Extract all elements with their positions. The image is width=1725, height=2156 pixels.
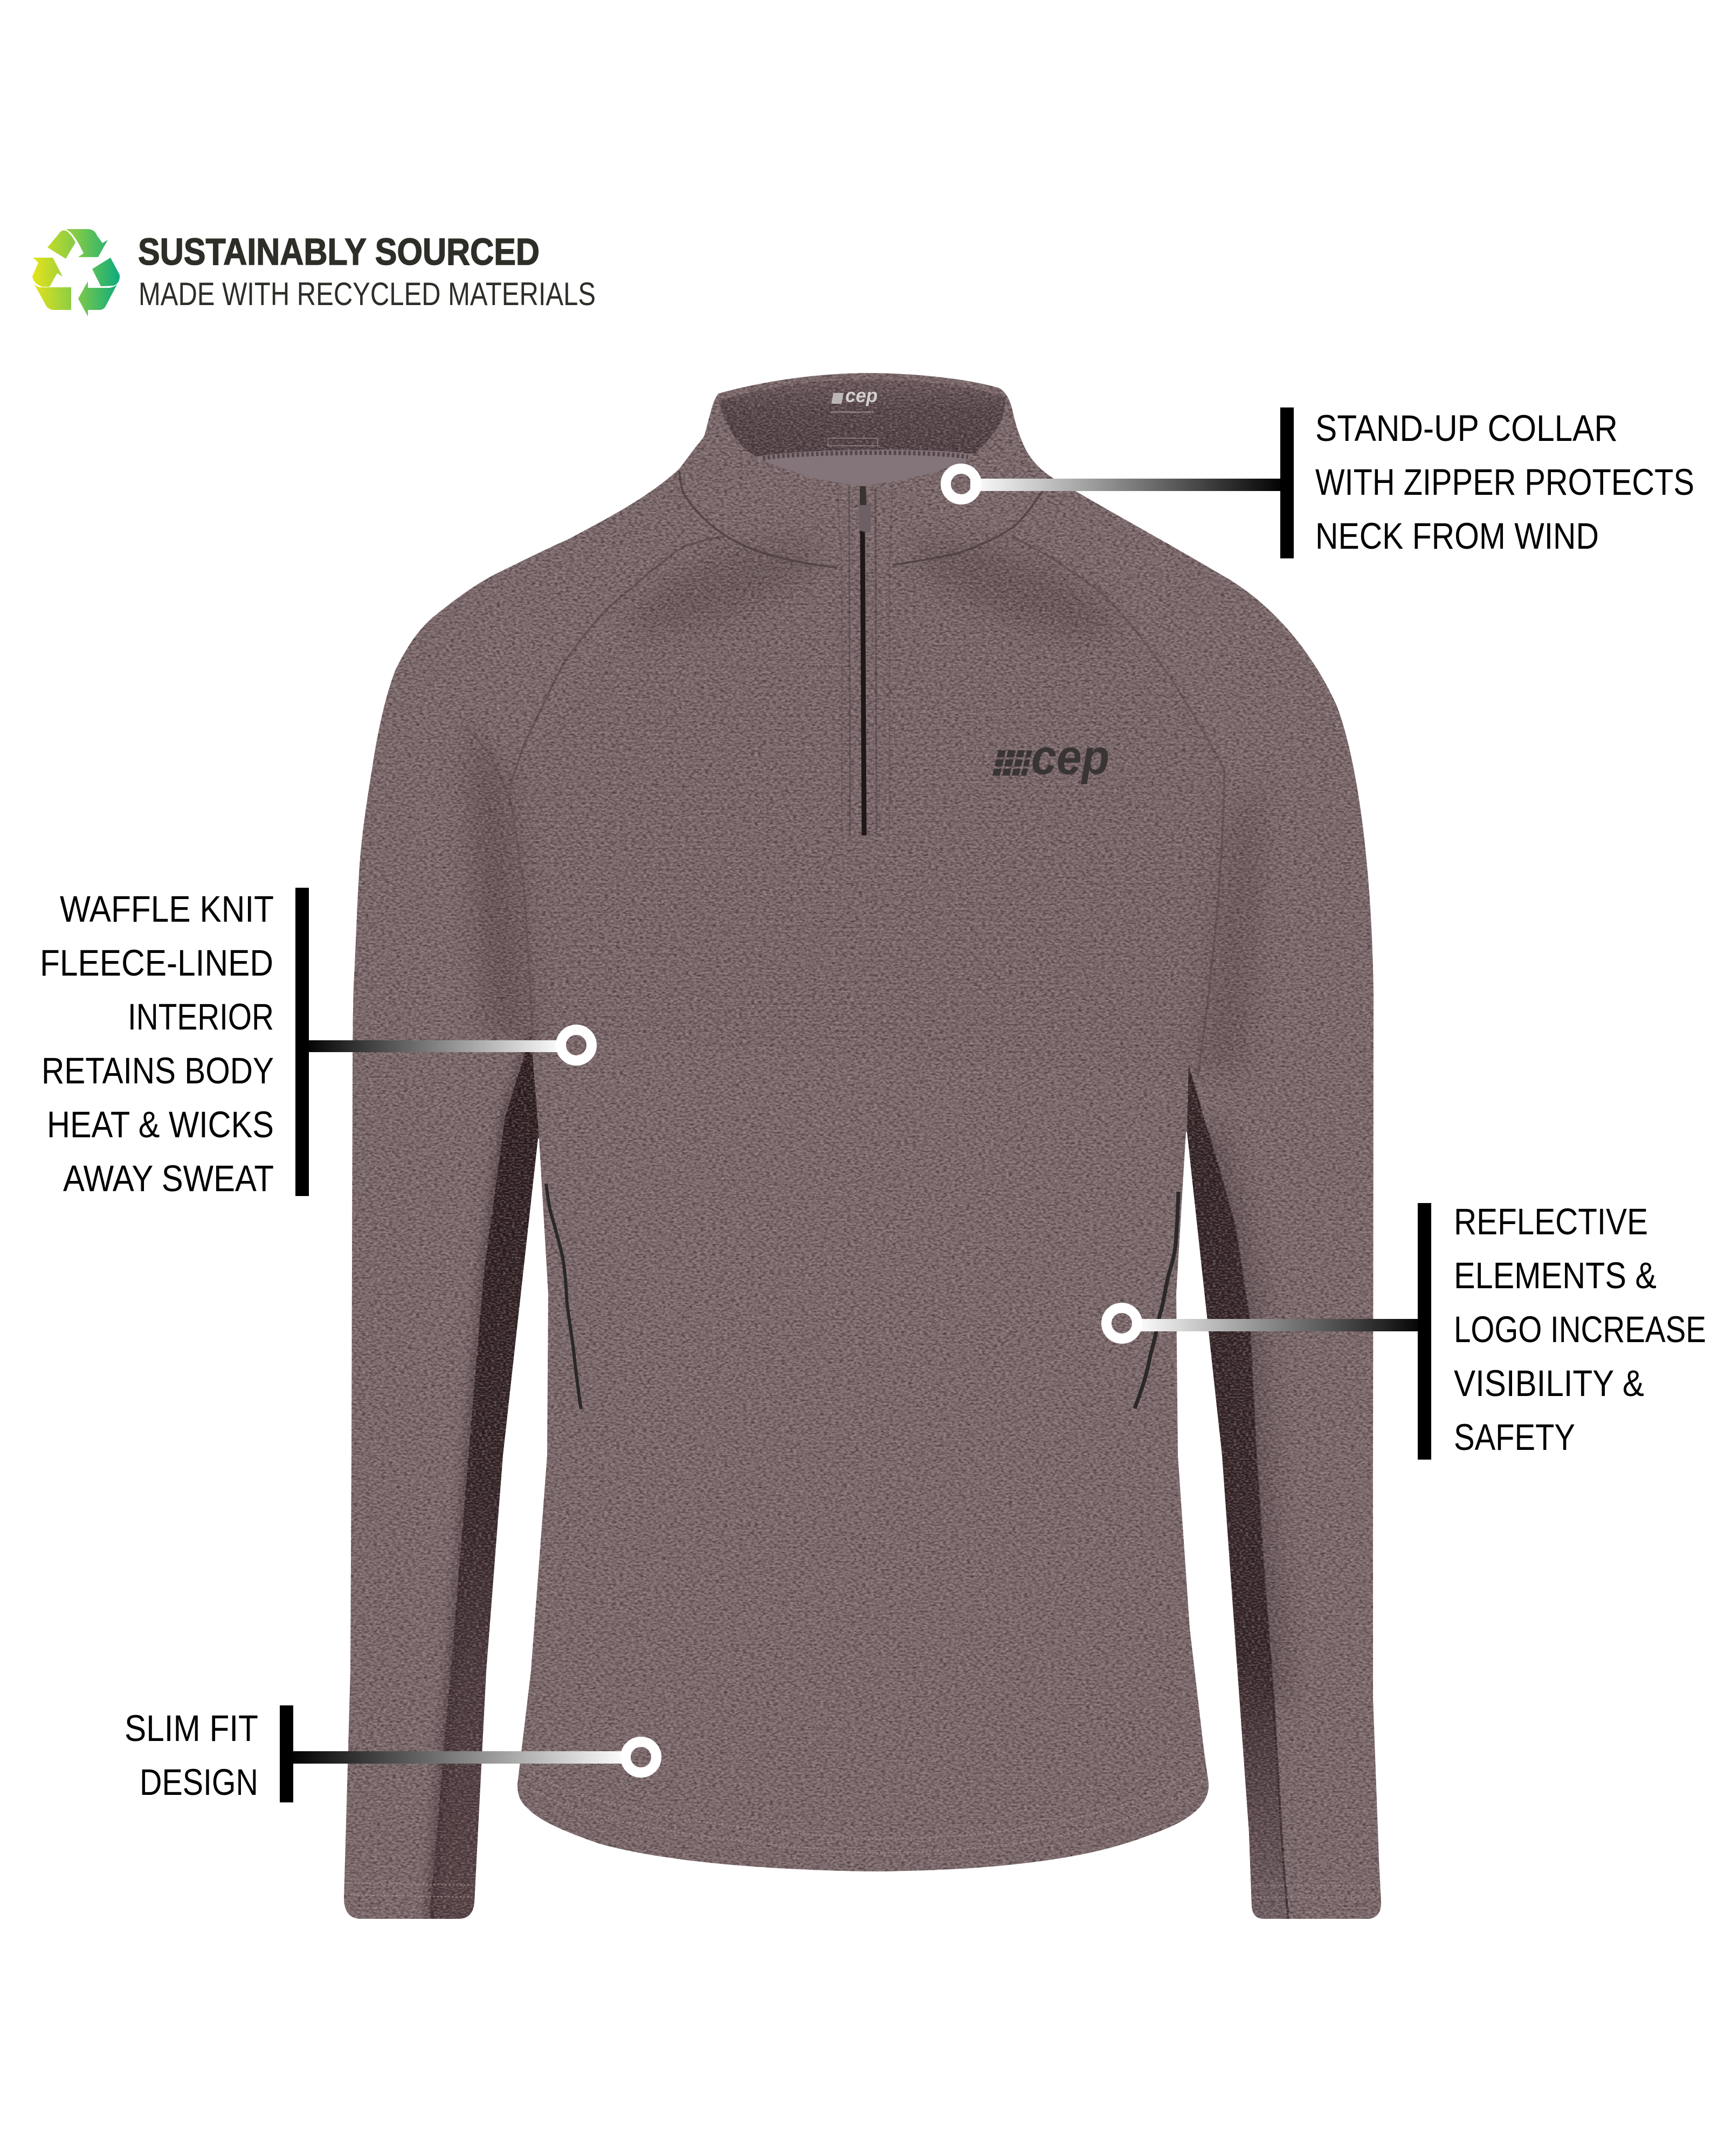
text block: VISIBILITY & bbox=[1454, 1363, 1644, 1404]
connector line bbox=[305, 1040, 563, 1052]
collar tag logo: cep bbox=[845, 384, 878, 406]
ring marker bbox=[561, 1029, 592, 1061]
callout: slim fit bbox=[125, 1705, 657, 1803]
right side panel shadow bbox=[1187, 1065, 1288, 1919]
chest logo bbox=[992, 730, 1109, 785]
text block: STAND-UP COLLAR bbox=[1315, 407, 1618, 449]
fabric heather noise bbox=[323, 367, 1402, 1930]
text block: INTERIOR bbox=[128, 996, 274, 1038]
bar bbox=[1418, 1203, 1431, 1460]
right sleeve fold shadow bbox=[1199, 776, 1262, 1073]
ring marker bbox=[1106, 1308, 1137, 1339]
connector line bbox=[970, 479, 1286, 491]
callout: waffle knit bbox=[40, 888, 592, 1199]
left sleeve fold shadow bbox=[469, 724, 533, 1038]
product photo: half-zip top bbox=[323, 367, 1402, 1930]
text block bbox=[1454, 1201, 1706, 1458]
text block: WAFFLE KNIT bbox=[60, 888, 274, 930]
text block: AWAY SWEAT bbox=[63, 1158, 274, 1199]
ring marker bbox=[625, 1742, 657, 1772]
collar and raglan seams bbox=[460, 471, 1224, 1076]
text block: NECK FROM WIND bbox=[1315, 515, 1599, 557]
connector line bbox=[288, 1751, 628, 1764]
heading: sustainably sourced bbox=[138, 231, 596, 312]
inner collar bbox=[719, 379, 1005, 457]
text block: SLIM FIT bbox=[125, 1708, 258, 1749]
bar bbox=[280, 1705, 293, 1802]
bar bbox=[295, 888, 309, 1196]
zipper bbox=[862, 531, 864, 835]
zipper pull bbox=[859, 505, 871, 532]
ring marker bbox=[946, 469, 977, 499]
left side panel shadow bbox=[429, 1035, 539, 1919]
recycling icon bbox=[32, 229, 120, 316]
text block bbox=[125, 1708, 258, 1803]
yoke shading right bbox=[917, 537, 1109, 638]
heading: sustainably sourced: SUSTAINABLY SOURCED bbox=[138, 231, 540, 273]
text block: SAFETY bbox=[1454, 1416, 1575, 1458]
text block: HEAT & WICKS bbox=[47, 1104, 274, 1145]
text block bbox=[1315, 407, 1694, 557]
text block: REFLECTIVE bbox=[1454, 1201, 1648, 1242]
callout: collar bbox=[946, 407, 1694, 558]
chest logo: cep bbox=[1031, 730, 1109, 785]
right pocket bbox=[1135, 1192, 1178, 1408]
callout: reflective bbox=[1106, 1201, 1706, 1460]
hem and cuff stitching bbox=[346, 1769, 1380, 1897]
chest waffle stripes bbox=[510, 537, 1224, 1076]
connector line bbox=[1135, 1319, 1426, 1331]
left pocket bbox=[546, 1184, 581, 1409]
text block: FLEECE-LINED bbox=[40, 942, 273, 984]
collar tag logo bbox=[828, 384, 878, 446]
text block bbox=[40, 888, 274, 1199]
sub-heading: recycled materials: MADE WITH RECYCLED MATERIALS bbox=[139, 276, 596, 312]
yoke shading left bbox=[637, 538, 814, 631]
text block: DESIGN bbox=[140, 1761, 258, 1803]
text block: RETAINS BODY bbox=[42, 1050, 274, 1091]
inner ribbed lining bbox=[756, 450, 974, 486]
text block: ELEMENTS & bbox=[1454, 1255, 1657, 1296]
bar bbox=[1280, 407, 1294, 558]
